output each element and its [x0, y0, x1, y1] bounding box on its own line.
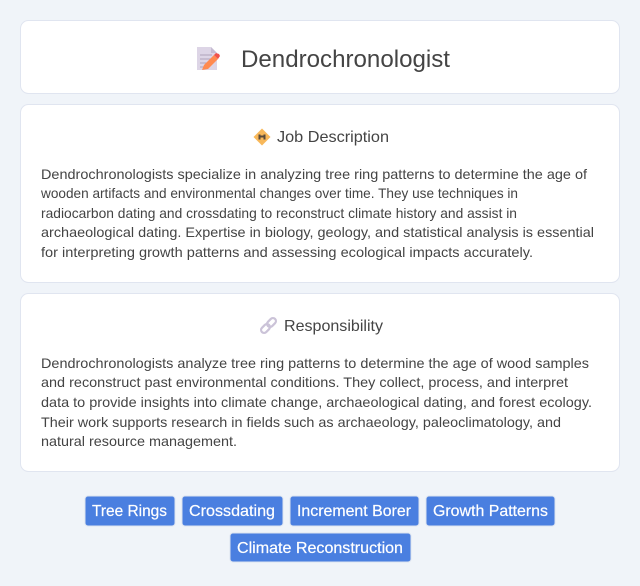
tag: climate reconstruction: Climate Reconstruction: [237, 540, 403, 557]
text block: job description: for interpreting growth patterns and assessing ecological impacts accurately.: [41, 244, 533, 260]
text block: responsibility: natural resource management.: [41, 433, 237, 449]
panel: title header: [20, 20, 620, 94]
tag: growth patterns: Growth Patterns: [433, 503, 548, 520]
text block: job description: archaeological dating. Expertise in biology, geology, and statistical analysis is essential: [41, 224, 594, 240]
icon: orange diamond: [254, 128, 270, 146]
panel: job description: [20, 104, 620, 282]
tag: tree rings: [85, 496, 175, 526]
tag: growth patterns: [426, 496, 555, 526]
text block: responsibility: and reconstruct past environmental conditions. They collect, process, and interpret: [41, 374, 568, 390]
tag: increment borer: [290, 496, 419, 526]
title: Dendrochronologist: [241, 46, 450, 73]
tag: crossdating: Crossdating: [189, 503, 275, 520]
tag: increment borer: Increment Borer: [297, 503, 412, 520]
text block: responsibility: Their work supports research in fields such as archaeology, paleoclimatology, and: [41, 414, 561, 430]
heading: responsibility: Responsibility: [284, 318, 383, 335]
text block: job description: wooden artifacts and environmental changes over time. They use techniques in: [40, 185, 518, 201]
icon: document with pencil: [197, 47, 220, 70]
text block: responsibility: [41, 355, 592, 449]
tags: [85, 496, 555, 562]
text block: job description: Dendrochronologists specialize in analyzing tree ring patterns to determine the age of: [41, 166, 587, 182]
heading: job description: Job Description: [277, 129, 389, 146]
text block: job description: [40, 166, 594, 260]
panel: responsibility: [20, 294, 620, 472]
tag: tree rings: Tree Rings: [92, 503, 167, 520]
text block: job description: radiocarbon dating and crossdating to reconstruct climate history and assist in: [41, 205, 517, 221]
text block: responsibility: Dendrochronologists analyze tree ring patterns to determine the age of wood samples: [41, 355, 589, 371]
text block: responsibility: data to provide insights into climate change, archaeological dating, and forest ecology.: [41, 394, 592, 410]
icon: chain link: [260, 317, 277, 334]
tag: climate reconstruction: [230, 533, 411, 562]
tag: crossdating: [182, 496, 283, 526]
